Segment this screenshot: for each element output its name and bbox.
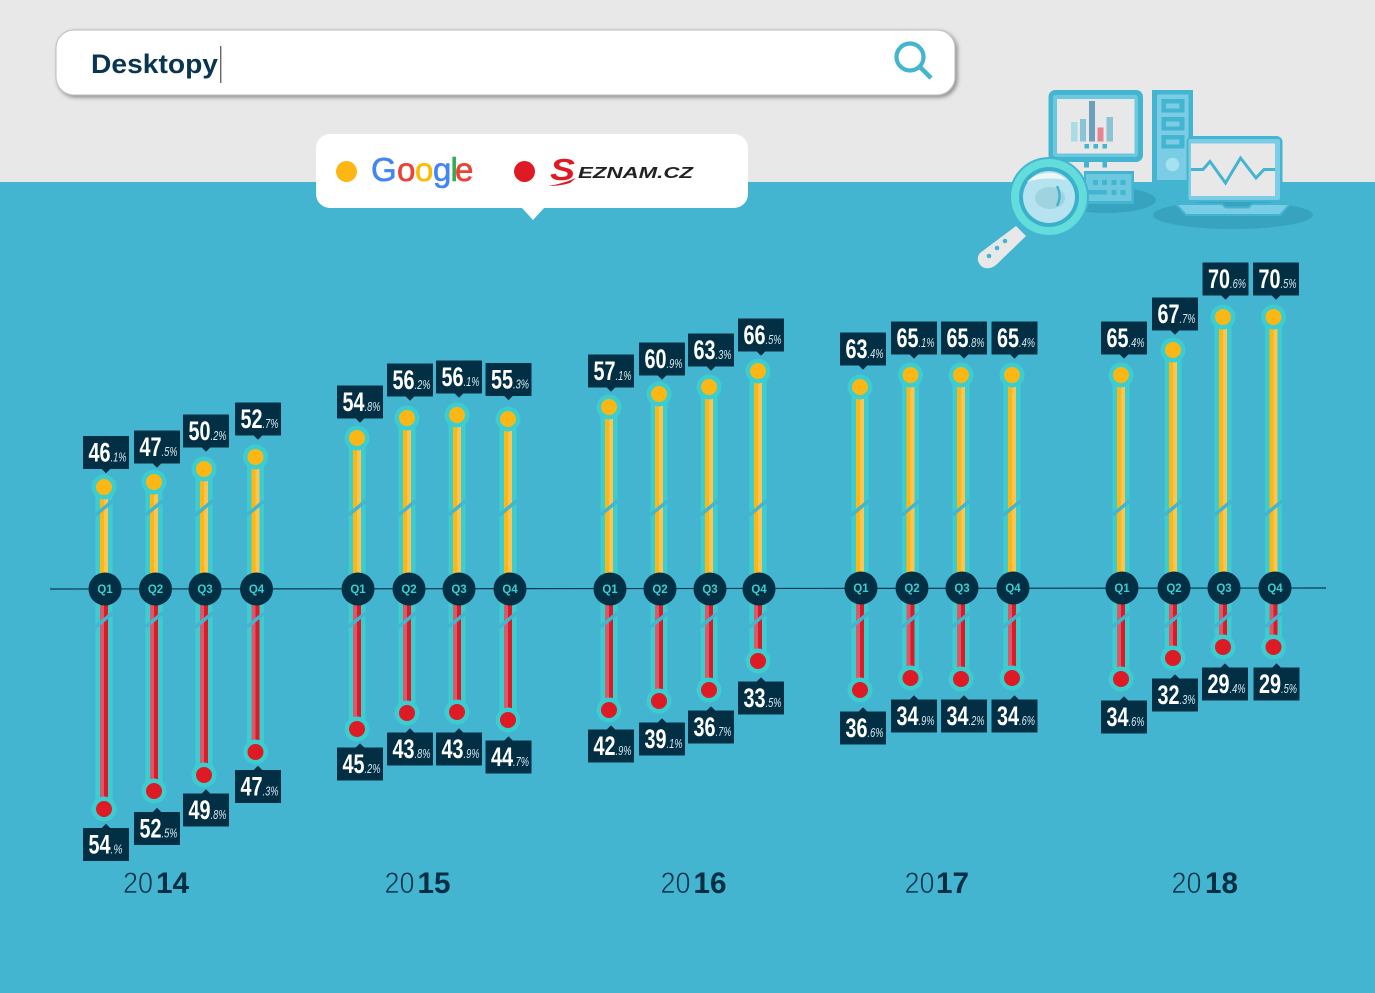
value label top	[236, 403, 280, 439]
value label bottom: 32	[1158, 680, 1180, 710]
2015 Q3 column	[436, 361, 482, 765]
logo: Google: Google	[371, 151, 473, 188]
icon: keyboard	[1084, 171, 1134, 204]
2015 Q1 column: Q1	[350, 584, 366, 596]
2018 Q1 column	[1102, 322, 1146, 733]
value label bottom	[236, 766, 280, 802]
value label top	[338, 386, 382, 422]
value label top: 52	[240, 404, 262, 434]
year 2017	[840, 322, 1037, 900]
illustration: computers and magnifier	[978, 90, 1313, 268]
value label bottom: 43	[392, 734, 414, 764]
value label top: 66	[744, 320, 766, 350]
value label top: .5%	[162, 445, 178, 459]
axis line	[50, 588, 1326, 589]
2017 Q2 column	[892, 322, 936, 732]
year label 2018	[1172, 867, 1238, 900]
value label bottom	[1152, 675, 1198, 711]
search bar	[56, 30, 955, 95]
value label top: 57	[594, 356, 616, 386]
2018 Q3 column	[1202, 263, 1248, 700]
value label top: 65	[946, 323, 968, 353]
2017 Q2 column: Q2	[904, 583, 920, 595]
value label top: .7%	[262, 417, 278, 431]
2017 Q4 column	[992, 322, 1037, 732]
year label 2014: 14	[156, 867, 190, 900]
value label top	[892, 322, 936, 358]
value label top	[388, 364, 432, 400]
value label bottom	[436, 729, 482, 765]
value label bottom: 44	[491, 742, 513, 772]
value label bottom	[486, 737, 531, 773]
value label top: .1%	[616, 369, 632, 383]
2018 Q3 column: Q3	[1216, 583, 1232, 595]
value label top: .5%	[766, 333, 782, 347]
value label bottom: 34	[997, 701, 1019, 731]
value label top: 63	[694, 335, 716, 365]
2016 Q2 column	[640, 343, 684, 755]
value label top	[84, 436, 128, 472]
year label 2016: 20	[660, 867, 690, 900]
value label bottom: .1%	[666, 737, 682, 751]
year label 2016	[660, 867, 726, 900]
2014 Q2 column: Q2	[148, 584, 163, 596]
2018 Q2 column: Q2	[1166, 583, 1182, 595]
value label top: .2%	[210, 429, 226, 443]
logo: Seznam	[548, 152, 695, 187]
legend dot: Google	[336, 161, 357, 182]
value label top: .4%	[1128, 336, 1144, 350]
icon: PC tower	[1152, 90, 1193, 182]
value label bottom: .8%	[414, 747, 430, 761]
value label top: .5%	[1280, 277, 1296, 291]
value label top: .3%	[513, 378, 529, 392]
2018 Q2 column	[1152, 298, 1198, 711]
value label top: 55	[491, 364, 513, 394]
year label 2018: 20	[1172, 867, 1202, 900]
year label 2015: 20	[384, 867, 414, 900]
2016 Q4 column: Q4	[751, 584, 767, 596]
value label bottom: .7%	[513, 755, 529, 769]
value label bottom	[738, 678, 784, 714]
value label bottom	[1254, 664, 1299, 700]
value label top: 65	[1106, 323, 1128, 353]
value label bottom: .4%	[1230, 682, 1246, 696]
value label bottom: 39	[644, 724, 666, 754]
value label bottom: 43	[442, 734, 464, 764]
2015 Q4 column: Q4	[502, 584, 518, 596]
year label 2018: 18	[1205, 867, 1238, 900]
value label top: 70	[1208, 264, 1230, 294]
2016 Q4 column	[738, 319, 784, 714]
value label top: .4%	[1019, 336, 1035, 350]
value label bottom	[640, 719, 684, 755]
value label bottom: 54	[88, 830, 111, 860]
value label top: 70	[1258, 264, 1280, 294]
2014 Q1 column	[84, 436, 128, 860]
year label 2015	[384, 867, 450, 900]
value label bottom: .3%	[262, 784, 278, 798]
value label top: 46	[88, 438, 110, 468]
value label bottom: .5%	[766, 696, 782, 710]
year 2014	[84, 403, 280, 900]
2016 Q1 column: Q1	[602, 584, 618, 596]
value label top: 47	[140, 432, 162, 462]
value label top: 56	[442, 362, 464, 392]
icon: laptop	[1176, 136, 1290, 215]
2018 Q4 column: Q4	[1267, 583, 1283, 595]
value label top: 60	[644, 344, 666, 374]
value label top	[486, 364, 531, 400]
value label bottom	[134, 808, 180, 844]
2014 Q4 column: Q4	[249, 584, 265, 596]
value label top	[1203, 263, 1248, 299]
value label top: 67	[1158, 299, 1180, 329]
year label 2017	[904, 867, 969, 900]
2015 Q2 column: Q2	[401, 584, 417, 596]
value label bottom: 49	[188, 795, 210, 825]
value label top: 65	[997, 323, 1019, 353]
value label bottom	[942, 696, 986, 732]
2016 Q1 column	[588, 355, 634, 762]
2017 Q3 column: Q3	[954, 583, 970, 595]
year label 2017: 20	[904, 867, 934, 900]
value label bottom: .9%	[464, 747, 480, 761]
value label bottom	[588, 726, 634, 762]
logo: Seznam: EZNAM.CZ	[578, 165, 695, 182]
2014 Q2 column	[134, 431, 180, 844]
value label bottom: 34	[1106, 702, 1129, 732]
2016 Q3 column: Q3	[702, 584, 718, 596]
value label bottom: 33	[744, 683, 766, 713]
value label bottom	[992, 696, 1037, 732]
value label top	[688, 334, 734, 370]
value label top	[184, 415, 228, 451]
value label top: .9%	[666, 357, 682, 371]
value label top: .1%	[464, 375, 480, 389]
value label top	[436, 361, 482, 397]
2014 Q4 column	[236, 403, 280, 802]
year label 2016: 16	[694, 867, 726, 900]
background: grey header	[0, 0, 1375, 182]
value label top: .3%	[716, 348, 732, 362]
value label bottom: .8%	[210, 808, 226, 822]
value label top	[134, 431, 180, 467]
value label bottom	[1202, 664, 1248, 700]
value label top	[1152, 298, 1198, 334]
value label top: 63	[846, 334, 868, 364]
value label top: .8%	[364, 400, 380, 414]
search text: Desktopy	[91, 49, 218, 79]
value label top: .6%	[1230, 277, 1246, 291]
year 2016	[588, 319, 784, 900]
legend panel	[316, 134, 748, 220]
2018 Q4 column	[1254, 263, 1299, 700]
value label bottom	[1102, 697, 1146, 733]
value label top	[840, 333, 886, 369]
2017 Q4 column: Q4	[1005, 583, 1021, 595]
value label bottom: .6%	[1019, 714, 1035, 728]
2015 Q3 column: Q3	[451, 584, 467, 596]
logo: Seznam: S	[550, 152, 575, 187]
value label top: 50	[188, 416, 210, 446]
value label top	[588, 355, 634, 391]
value label bottom: .5%	[162, 826, 178, 840]
value label bottom: .6%	[868, 726, 884, 740]
text cursor	[220, 46, 221, 83]
icon: magnifying glass	[896, 44, 931, 78]
value label bottom	[688, 707, 734, 743]
value label bottom: 45	[342, 749, 364, 779]
2018 Q1 column: Q1	[1114, 583, 1130, 595]
value label top	[738, 319, 784, 355]
value label bottom	[840, 708, 886, 744]
icon: desktop monitor	[1048, 90, 1143, 168]
value label bottom	[388, 729, 432, 765]
value label top	[1254, 263, 1298, 299]
value label top	[942, 322, 986, 358]
value label bottom: .2%	[968, 714, 984, 728]
value label bottom: 52	[140, 814, 162, 844]
value label bottom: 34	[946, 701, 969, 731]
value label bottom: 47	[240, 772, 262, 802]
value label top: 65	[896, 323, 918, 353]
value label bottom: .5%	[1281, 682, 1297, 696]
value label top: .7%	[1180, 312, 1196, 326]
value label top	[640, 343, 684, 379]
2014 Q3 column: Q3	[197, 584, 213, 596]
value label bottom: .6%	[1128, 715, 1144, 729]
value label bottom: .7%	[716, 725, 732, 739]
icon: magnifier	[978, 157, 1089, 268]
2016 Q3 column	[688, 334, 734, 743]
value label top	[1102, 322, 1146, 358]
value label top	[992, 322, 1037, 358]
2017 Q1 column: Q1	[853, 583, 869, 595]
2017 Q1 column	[840, 333, 886, 744]
value label bottom	[892, 696, 936, 732]
year 2015	[338, 361, 531, 900]
value label top: .4%	[868, 347, 884, 361]
2015 Q2 column	[388, 364, 432, 765]
value label top: 54	[342, 387, 365, 417]
value label bottom: .%	[110, 842, 122, 856]
year label 2015: 15	[418, 867, 450, 900]
value label top: .1%	[918, 336, 934, 350]
year label 2014: 20	[123, 867, 153, 900]
2017 Q3 column	[942, 322, 986, 732]
value label bottom: 29	[1208, 669, 1230, 699]
value label top: .1%	[110, 450, 126, 464]
value label bottom: 29	[1259, 669, 1281, 699]
value label bottom: 34	[896, 701, 919, 731]
value label top: .8%	[968, 336, 984, 350]
year label 2014	[123, 867, 190, 900]
2015 Q1 column	[338, 386, 382, 780]
legend dot: Seznam	[514, 161, 535, 182]
year 2018	[1102, 263, 1299, 900]
value label bottom	[184, 790, 228, 826]
value label top: .2%	[414, 378, 430, 392]
2014 Q3 column	[184, 415, 228, 826]
value label top: 56	[392, 365, 414, 395]
2016 Q2 column: Q2	[652, 584, 668, 596]
value label bottom	[84, 824, 128, 860]
value label bottom	[338, 744, 382, 780]
value label bottom: .9%	[918, 714, 934, 728]
2015 Q4 column	[486, 364, 531, 773]
2014 Q1 column: Q1	[97, 584, 113, 596]
value label bottom: 36	[694, 712, 716, 742]
value label bottom: .2%	[364, 762, 380, 776]
value label bottom: 42	[594, 731, 616, 761]
value label bottom: .3%	[1180, 693, 1196, 707]
year label 2017: 17	[936, 867, 969, 900]
value label bottom: .9%	[616, 744, 632, 758]
value label bottom: 36	[846, 713, 868, 743]
